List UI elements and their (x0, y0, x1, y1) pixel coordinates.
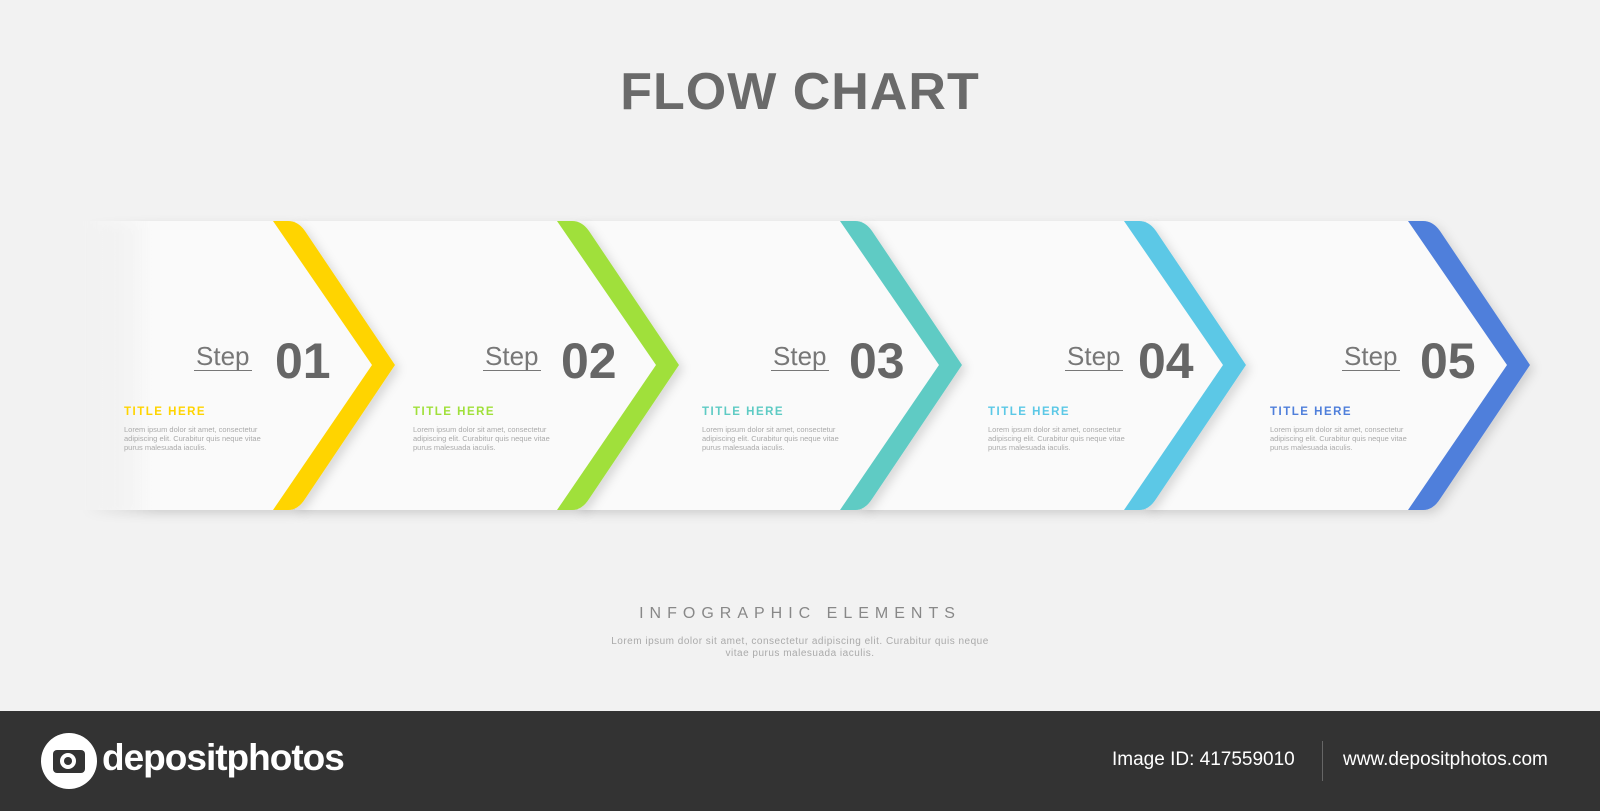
step 04 (862, 221, 1246, 510)
url: www.depositphotos.com (1343, 749, 1548, 770)
step 04 text: TITLE HERE (988, 406, 1070, 418)
step 01 text (124, 333, 331, 452)
icon: camera logo (41, 733, 97, 789)
step 05 text: Lorem ipsum dolor sit amet, consectetur adipiscing elit. Curabitur quis neque vitae purus malesuada iaculis. (1270, 425, 1407, 452)
step 02 text: 02 (561, 333, 617, 389)
step 05 text: TITLE HERE (1270, 406, 1352, 418)
step 03 text: Step (773, 341, 826, 371)
logo text: depositphotos (102, 737, 344, 778)
step 05 text: 05 (1420, 333, 1476, 389)
step 01 text: Step (196, 341, 250, 371)
step 03 (578, 221, 962, 510)
step 02 text: Step (485, 341, 538, 371)
footer bar (0, 711, 1600, 811)
step 01 text: TITLE HERE (124, 406, 206, 418)
description text: vitae purus malesuada iaculis. (726, 648, 874, 659)
step 05 (1146, 221, 1530, 510)
title: FLOW CHART (620, 63, 980, 121)
step 01 text: 01 (275, 333, 331, 389)
step 04 text: Lorem ipsum dolor sit amet, consectetur adipiscing elit. Curabitur quis neque vitae purus malesuada iaculis. (988, 425, 1125, 452)
step 04 text (988, 333, 1194, 452)
step 03 text: Lorem ipsum dolor sit amet, consectetur adipiscing elit. Curabitur quis neque vitae purus malesuada iaculis. (702, 425, 839, 452)
step 03 text (702, 333, 905, 452)
step 04 text: Step (1067, 341, 1120, 371)
step 02 text (413, 333, 617, 452)
step 03 text: TITLE HERE (702, 406, 784, 418)
step 01 (80, 221, 395, 510)
step 03 text: 03 (849, 333, 905, 389)
step 02 (295, 221, 679, 510)
step 04 text: 04 (1138, 333, 1194, 389)
subtitle: INFOGRAPHIC ELEMENTS (639, 605, 961, 622)
description text (611, 636, 989, 659)
step 02 text: TITLE HERE (413, 406, 495, 418)
step 01 text: Lorem ipsum dolor sit amet, consectetur adipiscing elit. Curabitur quis neque vitae purus malesuada iaculis. (124, 425, 261, 452)
step 05 text (1270, 333, 1476, 452)
image id: Image ID: 417559010 (1112, 749, 1295, 770)
description text: Lorem ipsum dolor sit amet, consectetur adipiscing elit. Curabitur quis neque (611, 636, 989, 647)
step 02 text: Lorem ipsum dolor sit amet, consectetur adipiscing elit. Curabitur quis neque vitae purus malesuada iaculis. (413, 425, 550, 452)
step 05 text: Step (1344, 341, 1398, 371)
